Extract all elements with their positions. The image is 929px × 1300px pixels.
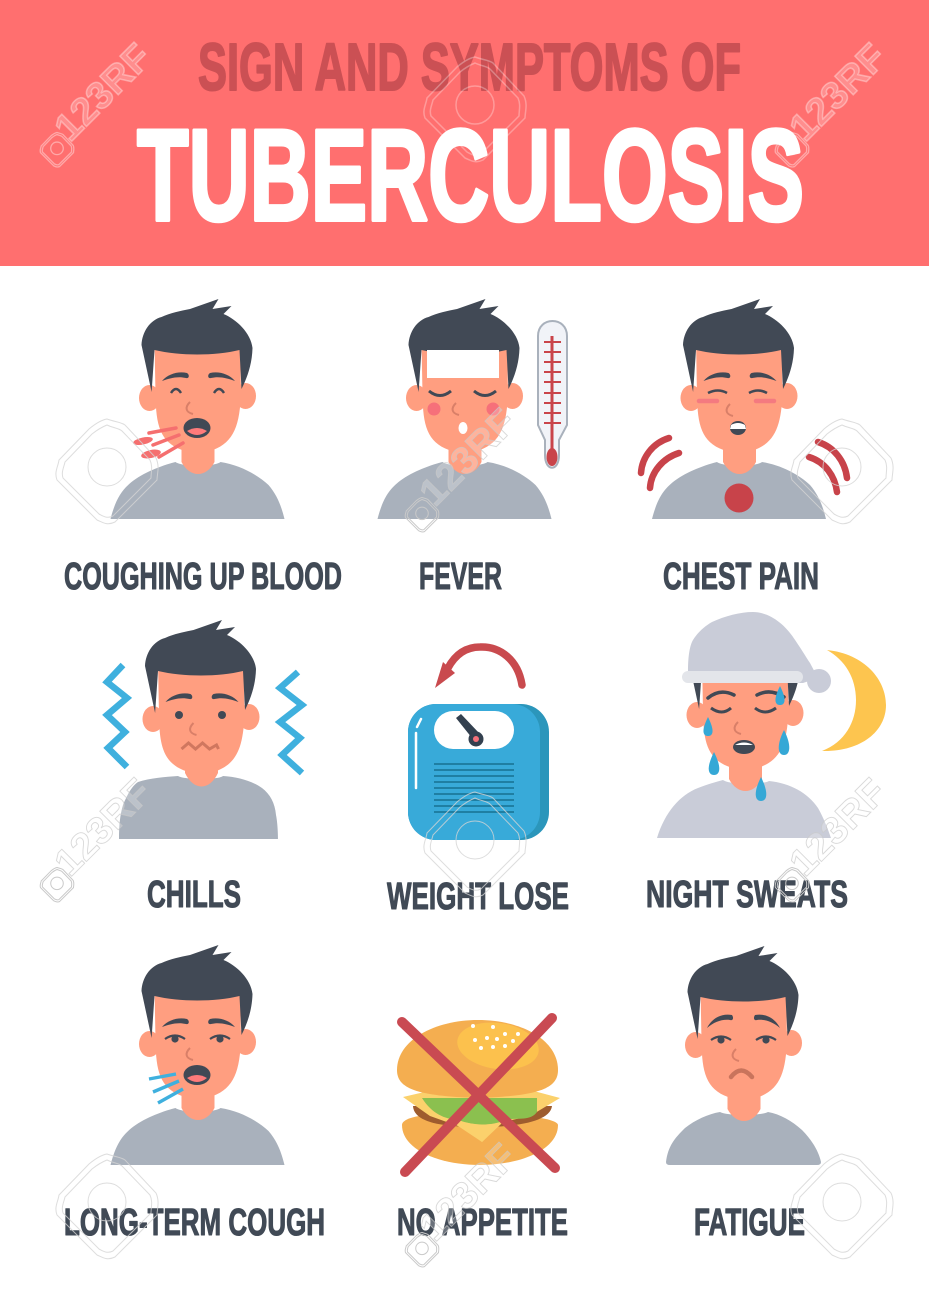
label: weight lose: WEIGHT LOSE bbox=[387, 876, 569, 918]
panel: no appetite burger bbox=[397, 1018, 560, 1172]
panel: night sweats bbox=[657, 612, 886, 838]
panel: weight loss scale bbox=[408, 647, 549, 840]
icon: crescent moon bbox=[822, 650, 886, 751]
watermarks: 123RF bbox=[47, 36, 160, 149]
label: no appetite: NO APPETITE bbox=[397, 1202, 568, 1244]
label: chills: CHILLS bbox=[147, 874, 241, 916]
header banner bbox=[0, 0, 929, 266]
label: fatigue: FATIGUE bbox=[694, 1202, 805, 1244]
panel: coughing up blood bbox=[110, 299, 284, 519]
panel: chest pain bbox=[641, 299, 847, 519]
watermarks: 123RF bbox=[412, 1136, 525, 1249]
watermarks: 123RF bbox=[412, 401, 525, 514]
label: night sweats: NIGHT SWEATS bbox=[646, 874, 848, 916]
watermarks: 123RF bbox=[47, 771, 160, 884]
watermarks: 123RF bbox=[782, 36, 895, 149]
panel: long-term cough bbox=[110, 945, 284, 1165]
label: coughing up blood: COUGHING UP BLOOD bbox=[64, 556, 342, 598]
panel: fatigue bbox=[666, 946, 821, 1165]
label: fever: FEVER bbox=[419, 556, 502, 598]
watermarks: 123RF bbox=[782, 771, 895, 884]
label: long-term cough: LONG-TERM COUGH bbox=[64, 1202, 325, 1244]
panel: fever bbox=[378, 299, 567, 519]
panel: chills bbox=[107, 620, 302, 839]
icon: thermometer bbox=[538, 321, 567, 468]
label: chest pain: CHEST PAIN bbox=[663, 556, 819, 598]
